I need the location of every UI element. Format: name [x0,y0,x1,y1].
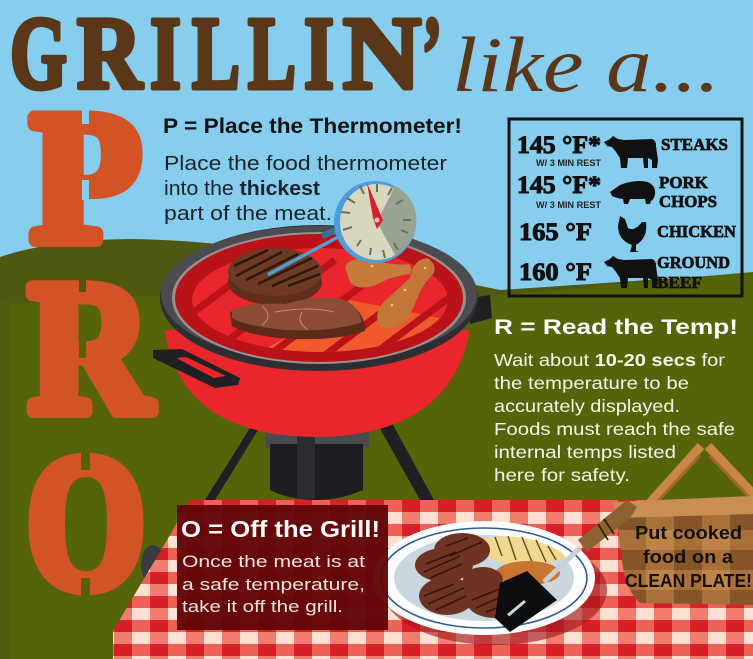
picnic table cloth [113,500,753,659]
icon: pig [610,181,655,204]
heading: O: O = Off the Grill! [181,516,380,542]
icon: cow [604,136,658,168]
temp: ground beef: 160 °F [519,259,592,286]
dial ticks [341,184,411,258]
panel background [177,505,388,630]
title words: like a...: like a... [452,21,720,108]
plate of food [373,500,637,645]
spatula shaft [544,548,580,582]
panel: off the grill [177,505,388,630]
instruction text: Place the food thermometer [164,152,447,175]
basket body [615,497,753,605]
patties [415,533,522,618]
plate [373,521,595,635]
icon: chicken [618,216,646,252]
hills [0,239,753,659]
right handle [470,295,492,324]
basket caption: Put cooked [635,523,742,543]
text block: read the temp [494,316,740,485]
instruction text: take it off the grill. [182,597,343,616]
big letter R: R [29,243,153,452]
grill handle [153,349,240,388]
grill rim [160,225,478,371]
temperature chart [509,119,742,296]
temp: steaks: 145 °F* [517,132,601,159]
thermometer dial [334,181,416,263]
grill bowl [165,330,470,437]
chicken piece [496,561,560,585]
spatula handle [578,500,637,552]
title word: GRILLIN' [10,0,442,111]
big letter P: P [31,74,141,281]
chart frame [509,119,742,296]
temp: chicken: 165 °F [519,219,592,246]
instruction text: accurately displayed. [494,396,680,416]
dial needle [367,183,383,229]
icon: ground beef cow [604,256,658,288]
chicken drumsticks [345,258,435,328]
label: pork chops: CHOPS [659,192,717,211]
basket handle [640,446,753,514]
grill legs [205,423,434,500]
spatula head [495,571,557,632]
instruction text: here for safety. [494,465,630,485]
instruction text: Foods must reach the safe [494,419,735,439]
bread [480,536,566,565]
heading: R: R = Read the Temp! [494,316,738,339]
thermometer probe [269,236,340,274]
temp: pork chops: 145 °F* [517,172,601,199]
grill leg behind table [141,545,165,585]
text block: place the thermometer [163,115,462,225]
heading: P: P = Place the Thermometer! [163,115,462,138]
instruction text: Wait about 10-20 secs for [494,350,721,370]
thermometer [269,181,416,274]
note: rest time pork: W/ 3 MIN REST [536,200,601,211]
burger patty [228,248,322,305]
picnic basket [612,446,753,605]
steak [230,298,366,339]
label: ground beef: GROUND [657,253,730,272]
label: pork chops: PORK [659,173,709,192]
big letter O: O [27,418,145,628]
instruction text: the temperature to be [494,373,689,393]
label: ground beef: BEEF [657,273,702,292]
title [10,0,720,111]
basket caption: CLEAN PLATE! [625,571,752,591]
grill base cylinder [265,430,369,500]
basket caption [625,523,752,591]
instruction text: Once the meat is at [182,552,365,571]
instruction text: into the thickest [164,177,317,200]
instruction text: a safe temperature, [182,575,365,594]
instruction text: internal temps listed [494,442,676,462]
plate shadow [383,535,607,645]
basket caption: food on a [643,547,734,567]
label: steaks: STEAKS [661,135,728,154]
note: rest time steaks: W/ 3 MIN REST [536,158,601,169]
instruction text: part of the meat. [164,202,332,225]
label: chicken: CHICKEN [657,222,737,241]
grill interior [175,234,463,362]
grill [153,225,505,500]
grate [192,248,448,352]
